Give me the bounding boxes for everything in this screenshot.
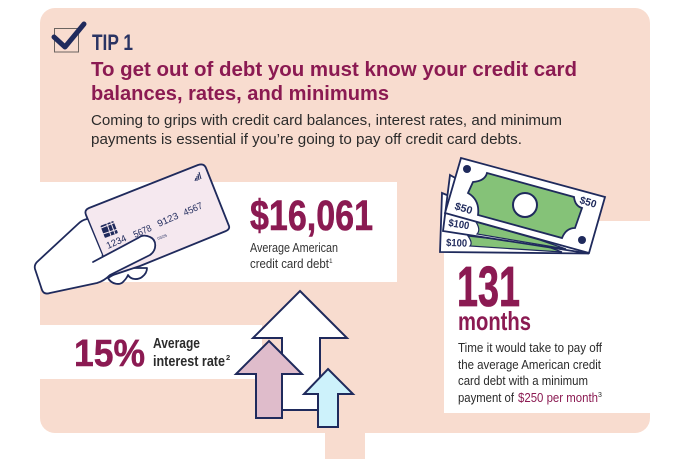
- text: months description: $250 per month: [518, 391, 598, 405]
- text: average debt label: [250, 241, 338, 271]
- credit card text: 1234: [105, 233, 128, 252]
- stat: interest rate: 15%: [74, 333, 145, 375]
- icon: checkbox: [54, 24, 84, 52]
- panel: credit card debt: [40, 182, 397, 282]
- banknote labels: $50: [578, 194, 598, 211]
- banknote labels: $50: [453, 200, 474, 217]
- text: months description: 3: [598, 392, 602, 399]
- text block: intro: payments is essential if you’re going to pay off credit card debts.: [91, 131, 522, 148]
- text: interest rate label: interest rate: [153, 354, 225, 370]
- credit card text: 4567: [182, 201, 204, 219]
- icon: card chip: [100, 220, 118, 238]
- banknote labels: $100: [448, 217, 470, 232]
- heading: tip title: balances, rates, and minimums: [91, 82, 389, 105]
- text block: intro: Coming to grips with credit card balances, interest rates, and minimum: [91, 112, 562, 129]
- text: interest rate label: Average: [153, 336, 200, 352]
- credit card text: 5678: [132, 223, 154, 241]
- text: months description: [458, 341, 602, 405]
- text: interest rate label: [153, 336, 230, 370]
- text: months description: Time it would take to pay off: [458, 341, 602, 355]
- heading: tip title: [91, 58, 577, 105]
- text: interest rate label: 2: [226, 353, 230, 362]
- credit card text: [105, 172, 204, 252]
- text: average debt label: credit card debt: [250, 257, 329, 271]
- text: months description: card debt with a minimum: [458, 374, 588, 388]
- stat: months number: 131: [457, 255, 520, 319]
- icon: rising arrows: [236, 291, 353, 427]
- credit card text: 9123: [156, 211, 180, 230]
- text: average debt label: Average American: [250, 241, 338, 255]
- heading: tip title: To get out of debt you must know your credit card: [91, 58, 577, 81]
- text block: intro: [91, 112, 562, 148]
- banknote labels: [446, 194, 598, 250]
- text: months description: payment of: [458, 391, 514, 405]
- text: months description: the average American credit: [458, 358, 601, 372]
- icon: stack of banknotes: [440, 158, 605, 254]
- icon: hand holding credit card: [35, 164, 229, 294]
- stat: months unit: months: [458, 306, 531, 336]
- heading: tip number: TIP 1: [92, 30, 133, 55]
- credit card text: 03/25: [157, 232, 168, 241]
- panel: months to pay off: [444, 221, 650, 413]
- banknote labels: $100: [446, 237, 467, 250]
- text: average debt label: 1: [329, 258, 333, 265]
- panel: interest rate: [40, 325, 262, 379]
- stat: average debt: $16,061: [250, 192, 373, 240]
